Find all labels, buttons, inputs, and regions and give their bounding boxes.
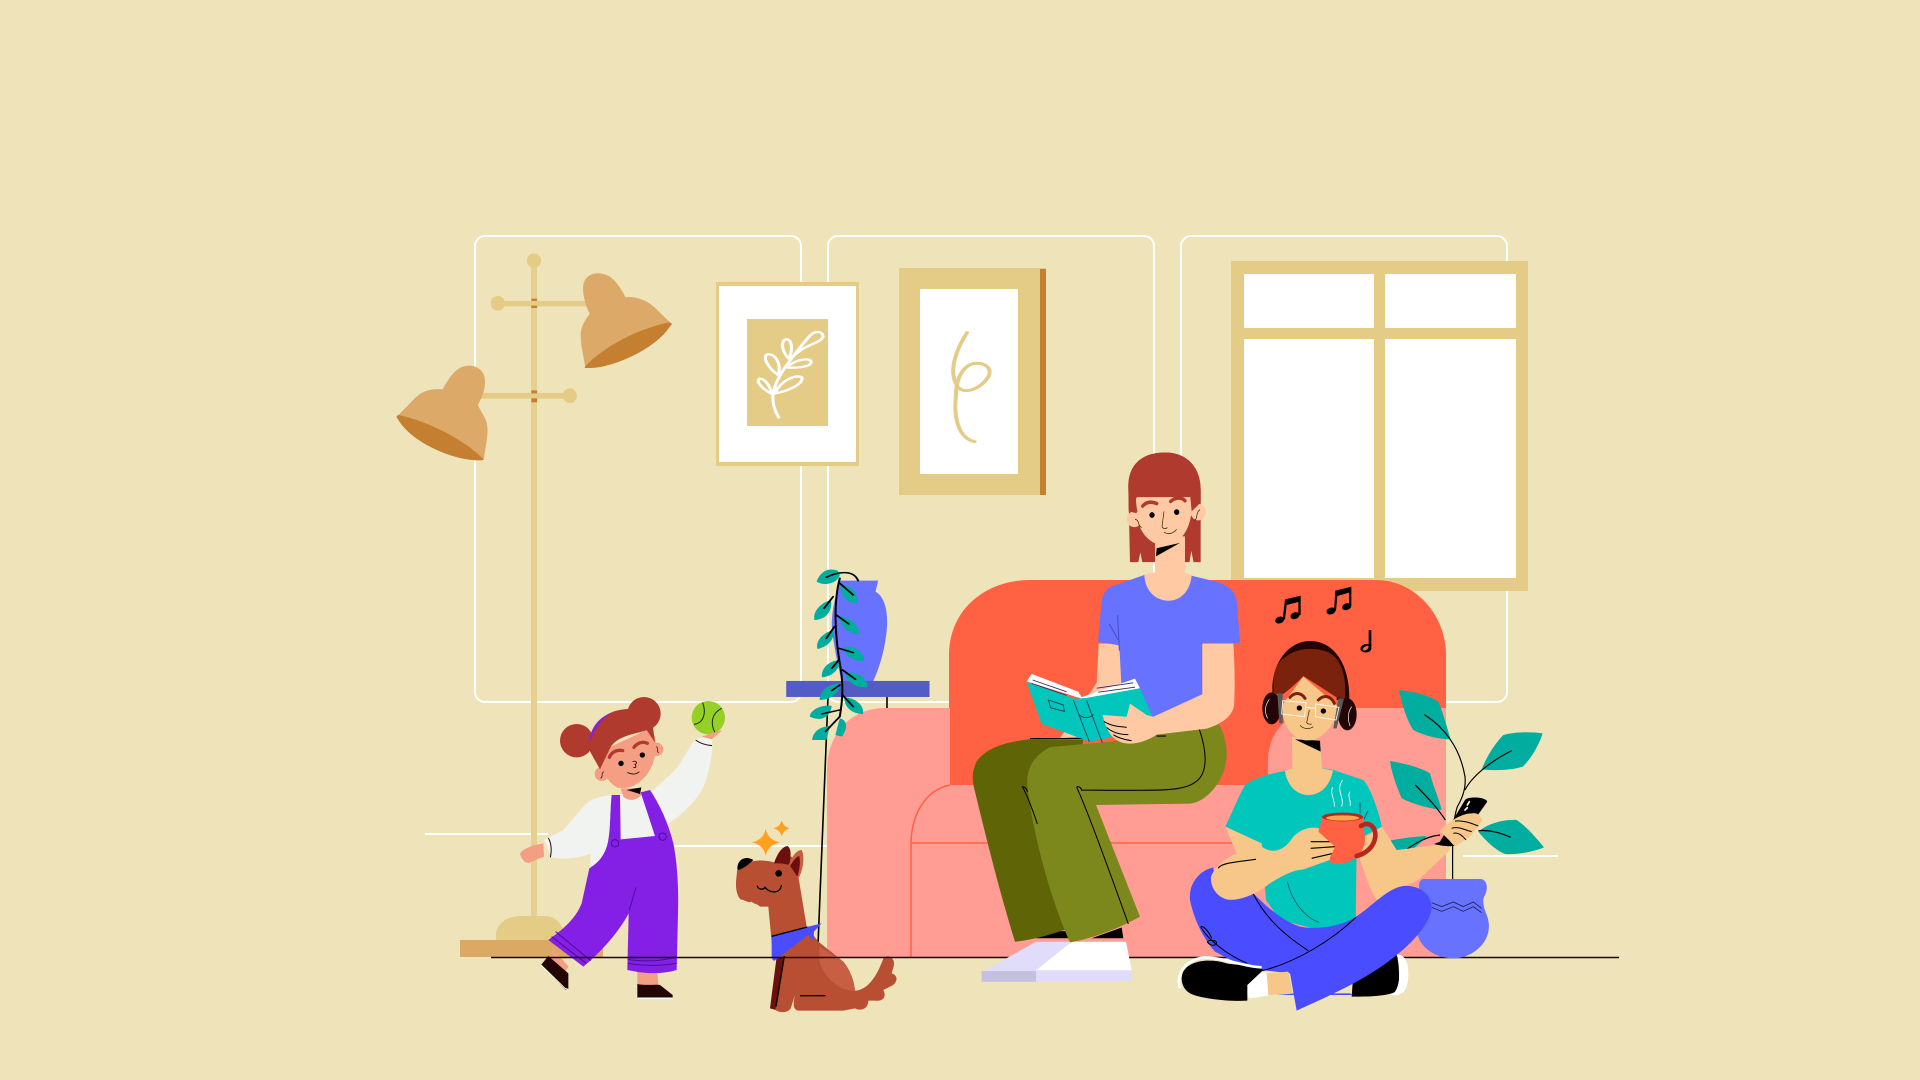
dog bandana [772, 923, 822, 961]
girl arms and sweater [544, 735, 712, 868]
potted plant [1385, 690, 1544, 958]
window [1231, 261, 1528, 591]
floor line [491, 956, 1619, 958]
girl legs and shoes [550, 948, 659, 987]
framed leaf picture [716, 282, 859, 466]
sofa [827, 580, 1446, 957]
man headphones [1262, 641, 1357, 730]
phone [1434, 797, 1487, 846]
coffee mug [1318, 780, 1375, 864]
hanging vine [810, 569, 868, 740]
woman head [1127, 511, 1142, 527]
music notes [1274, 587, 1371, 652]
man forearm and cup hand [1211, 827, 1337, 900]
framed squiggle picture [899, 268, 1046, 495]
man arm with phone [1360, 827, 1450, 900]
woman pants [973, 739, 1083, 942]
girl overalls [548, 790, 678, 973]
woman hair back [1128, 452, 1201, 562]
girl head [595, 767, 609, 781]
man torso [1225, 768, 1382, 930]
book [1027, 674, 1155, 743]
shelf with vase [786, 581, 930, 945]
floor lamp [397, 253, 672, 957]
tennis ball [692, 701, 725, 734]
woman hand and forearm [1103, 644, 1235, 744]
man head [1282, 677, 1338, 740]
man pants [1190, 867, 1432, 1011]
woman reading on sofa [973, 452, 1240, 982]
dog [736, 820, 896, 1012]
woman shirt [1098, 575, 1240, 717]
man left shoe and foot [1267, 972, 1293, 995]
sparkles [752, 820, 790, 856]
man with headphones [1179, 587, 1487, 1011]
plant pot [1416, 879, 1489, 958]
woman shoes [1036, 927, 1123, 938]
girl playing with ball [520, 697, 725, 998]
man legs behind [1352, 955, 1399, 997]
woman neck and arms [1143, 536, 1193, 603]
